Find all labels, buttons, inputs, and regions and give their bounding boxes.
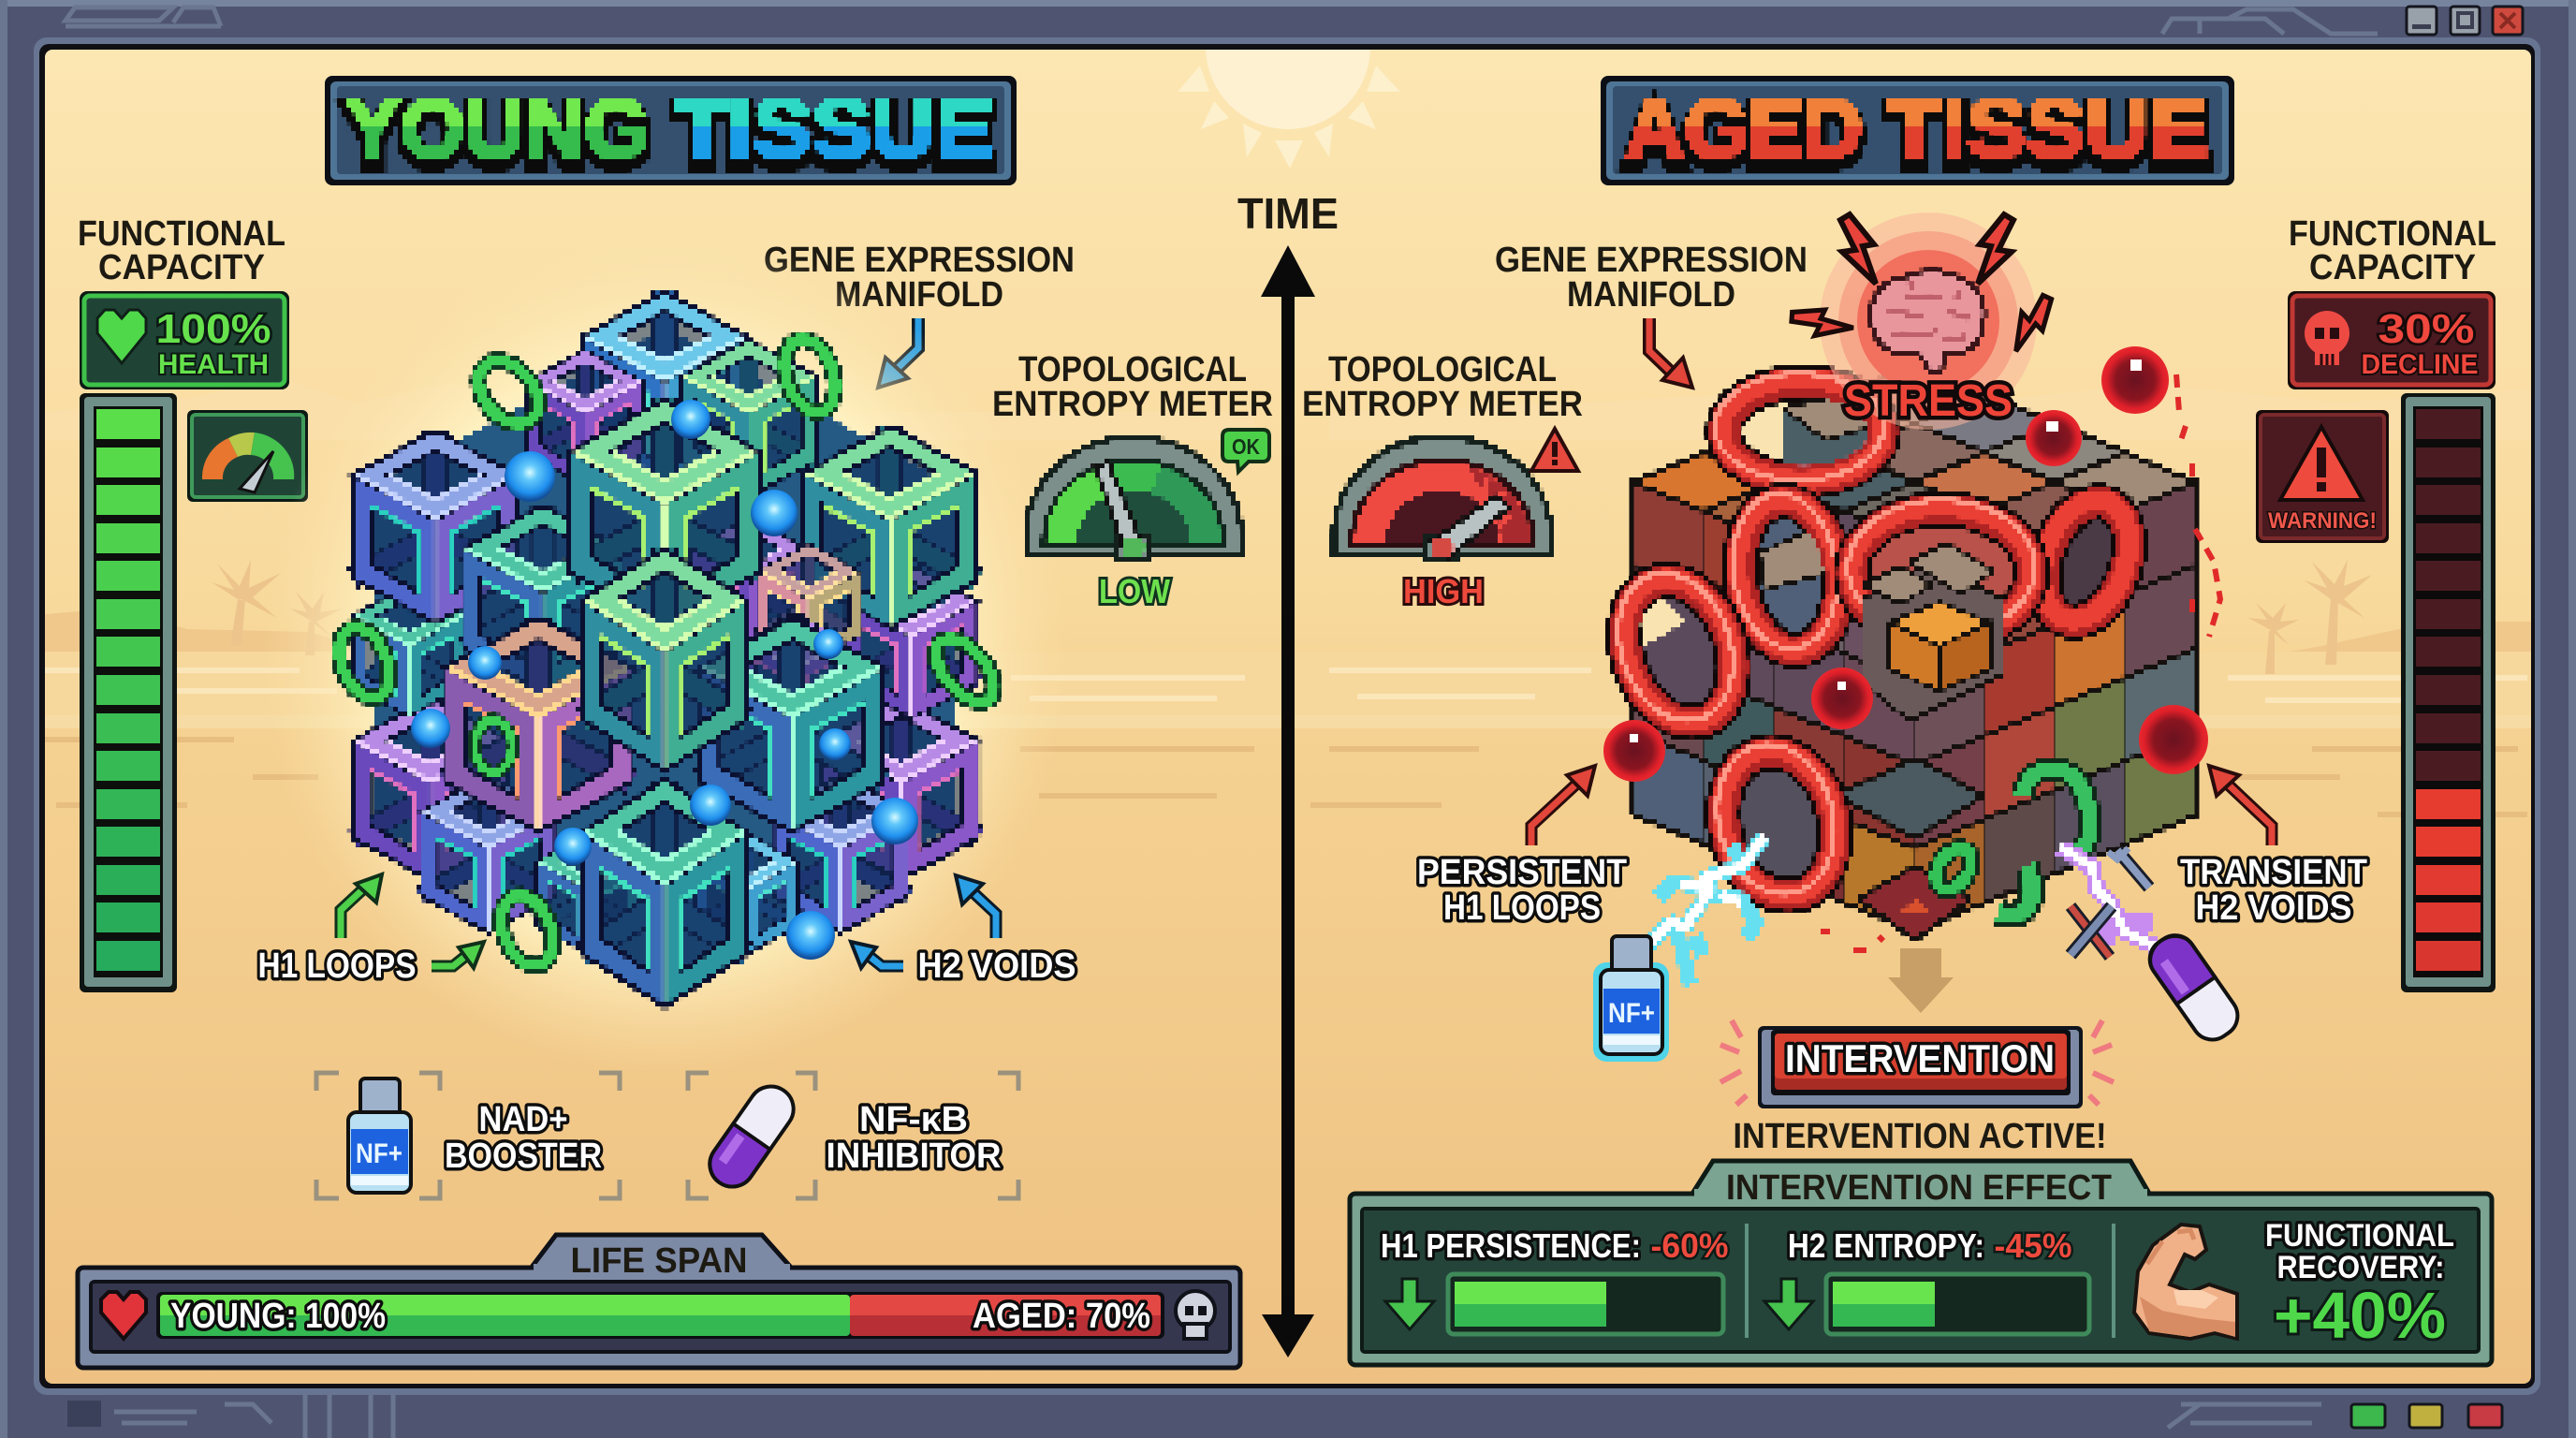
gauge label right: TOPOLOGICAL (1328, 350, 1557, 389)
gauge label left: ENTROPY METER (992, 385, 1273, 424)
time axis arrow: TIME (1237, 189, 1339, 238)
ok speech bubble (1222, 430, 1269, 472)
h2 entropy metric: -45% (1994, 1226, 2072, 1265)
small gauge icon (187, 410, 308, 502)
functional capacity label right: CAPACITY (2309, 248, 2476, 287)
ok speech bubble: OK (1232, 434, 1260, 459)
persistent h1 loops label (1417, 853, 1627, 928)
capacity bar right 30% (2401, 393, 2496, 992)
arrow persistent (1531, 766, 1595, 845)
red transient void balls (1603, 346, 2208, 782)
title: aged tissue: AGED (1625, 82, 1863, 176)
warning triangle small (1531, 429, 1578, 471)
down arrow to intervention (1888, 948, 1954, 1013)
palm trees (212, 560, 2372, 674)
functional capacity label left: CAPACITY (98, 248, 265, 287)
title: young tissue: TISSUE (674, 90, 994, 183)
decline badge: 30% (2378, 306, 2475, 352)
nf-kb inhibitor legend: INHIBITOR (826, 1137, 1002, 1176)
functional capacity label left (78, 214, 285, 287)
health badge: HEALTH (158, 349, 269, 380)
entropy gauge high: HIGH (1403, 572, 1484, 610)
title: young tissue: YOUNG (345, 82, 649, 176)
h2 entropy metric (1764, 1226, 2089, 1334)
nad+ booster legend: BOOSTER (445, 1137, 602, 1176)
title: young tissue: TISSUE (674, 82, 994, 176)
gauge label left (992, 350, 1273, 424)
lifespan bar: YOUNG: 100% (170, 1297, 386, 1336)
decline badge: DECLINE (2361, 349, 2479, 380)
h2 entropy metric: H2 ENTROPY: (1788, 1226, 1984, 1265)
gene expression label right: MANIFOLD (1567, 275, 1735, 315)
entropy gauge high (1331, 433, 1554, 610)
icon: purple pill (701, 1078, 802, 1196)
beam: nf-kb inhibitor energy (2060, 847, 2159, 948)
h1 persistence metric: -60% (1651, 1226, 1728, 1265)
title: young tissue (325, 76, 1017, 185)
purple pill applied (2142, 928, 2246, 1048)
warning panel (2256, 410, 2389, 543)
arrow: gene expression left (878, 318, 918, 388)
health badge: 100% (155, 306, 271, 352)
icon: red skull (2305, 311, 2349, 365)
title: aged tissue: AGED (1625, 90, 1863, 183)
functional recovery stat: FUNCTIONAL (2265, 1218, 2454, 1254)
intervention effect panel: INTERVENTION EFFECT (1726, 1168, 2112, 1208)
title: aged tissue: TISSUE (1888, 82, 2208, 176)
green H1 loop rings (329, 332, 1005, 974)
title: aged tissue (1601, 76, 2234, 185)
gene expression label left: MANIFOLD (835, 275, 1003, 315)
transient h2 voids label: TRANSIENT (2180, 853, 2367, 892)
nf-kb inhibitor legend (688, 1073, 1018, 1198)
warning panel: WARNING! (2268, 508, 2377, 534)
transient h2 voids label: H2 VOIDS (2196, 888, 2351, 928)
gene expression label right (1495, 241, 1808, 315)
functional capacity label right (2289, 214, 2496, 287)
arrow transient (2209, 766, 2272, 845)
arrows h2 voids (851, 875, 996, 968)
lifespan bar: AGED: 70% (973, 1297, 1150, 1336)
functional capacity label left: FUNCTIONAL (78, 214, 285, 254)
h1 persistence metric (1381, 1226, 1728, 1334)
entropy gauge low (1023, 434, 1244, 610)
intervention effect panel (1350, 1161, 2492, 1365)
stress label: STRESS (1844, 376, 2012, 426)
icon: heart (101, 1292, 146, 1339)
gene expression label left (764, 241, 1075, 315)
time axis arrow (1237, 189, 1339, 1357)
blue void orbs (411, 400, 918, 960)
lifespan bar (156, 1292, 1164, 1339)
nf-kb inhibitor legend: NF-κB (859, 1100, 968, 1139)
stress brain icon (1788, 213, 2064, 430)
icon: flexed muscle (2134, 1225, 2237, 1339)
red debris sparks (1821, 374, 2220, 950)
h2 voids label left: H2 VOIDS (917, 946, 1076, 986)
nad+ booster legend: NAD+ (479, 1100, 567, 1139)
health badge (80, 291, 289, 389)
entropy gauge low: LOW (1099, 572, 1170, 610)
gene expression label left: GENE EXPRESSION (764, 241, 1075, 280)
transient h2 voids label (2180, 853, 2367, 928)
title: young tissue: YOUNG (345, 90, 649, 183)
functional recovery stat (2265, 1218, 2454, 1352)
nad+ booster legend (316, 1073, 620, 1198)
arrow: gene expression right (1649, 318, 1692, 388)
persistent h1 loops label: PERSISTENT (1417, 853, 1627, 892)
sun (1178, 50, 1400, 169)
functional capacity label right: FUNCTIONAL (2289, 214, 2496, 254)
intervention active text: INTERVENTION ACTIVE! (1734, 1117, 2106, 1156)
gauge label left: TOPOLOGICAL (1018, 350, 1247, 389)
life span panel (78, 1235, 1240, 1368)
intervention button (1720, 1020, 2114, 1108)
arrows h1 loops (341, 874, 484, 968)
beam: nad+ energy (1649, 835, 1764, 985)
decline badge (2288, 291, 2496, 389)
title: aged tissue: TISSUE (1888, 90, 2208, 183)
young tissue cube lattice (263, 234, 1068, 1077)
capacity bar left 100% (80, 393, 177, 992)
h1 loops label left: H1 LOOPS (258, 946, 416, 986)
red persistent loops (1599, 374, 2144, 908)
life span panel: LIFE SPAN (571, 1241, 747, 1281)
bottom status lights (2351, 1404, 2502, 1428)
persistent h1 loops label: H1 LOOPS (1443, 888, 1601, 928)
aged tissue broken cube (1599, 346, 2220, 950)
icon: skull (1176, 1291, 1215, 1339)
top window controls (2407, 7, 2523, 35)
h1 persistence metric: H1 PERSISTENCE: (1381, 1226, 1641, 1265)
icon: wrench tools (2071, 848, 2149, 957)
gauge label right (1302, 350, 1583, 424)
gauge label right: ENTROPY METER (1302, 385, 1583, 424)
icon: nad+ bottle: NF+ (356, 1138, 402, 1169)
nad+ bottle applied: NF+ (1608, 998, 1655, 1029)
nad+ bottle applied (1593, 936, 1669, 1062)
functional recovery stat: RECOVERY: (2276, 1250, 2445, 1285)
gene expression label right: GENE EXPRESSION (1495, 241, 1808, 280)
functional recovery stat: +40% (2274, 1279, 2446, 1352)
broken green rings (1928, 769, 2090, 915)
icon: nad+ bottle (348, 1078, 411, 1193)
intervention button: INTERVENTION (1785, 1036, 2055, 1080)
